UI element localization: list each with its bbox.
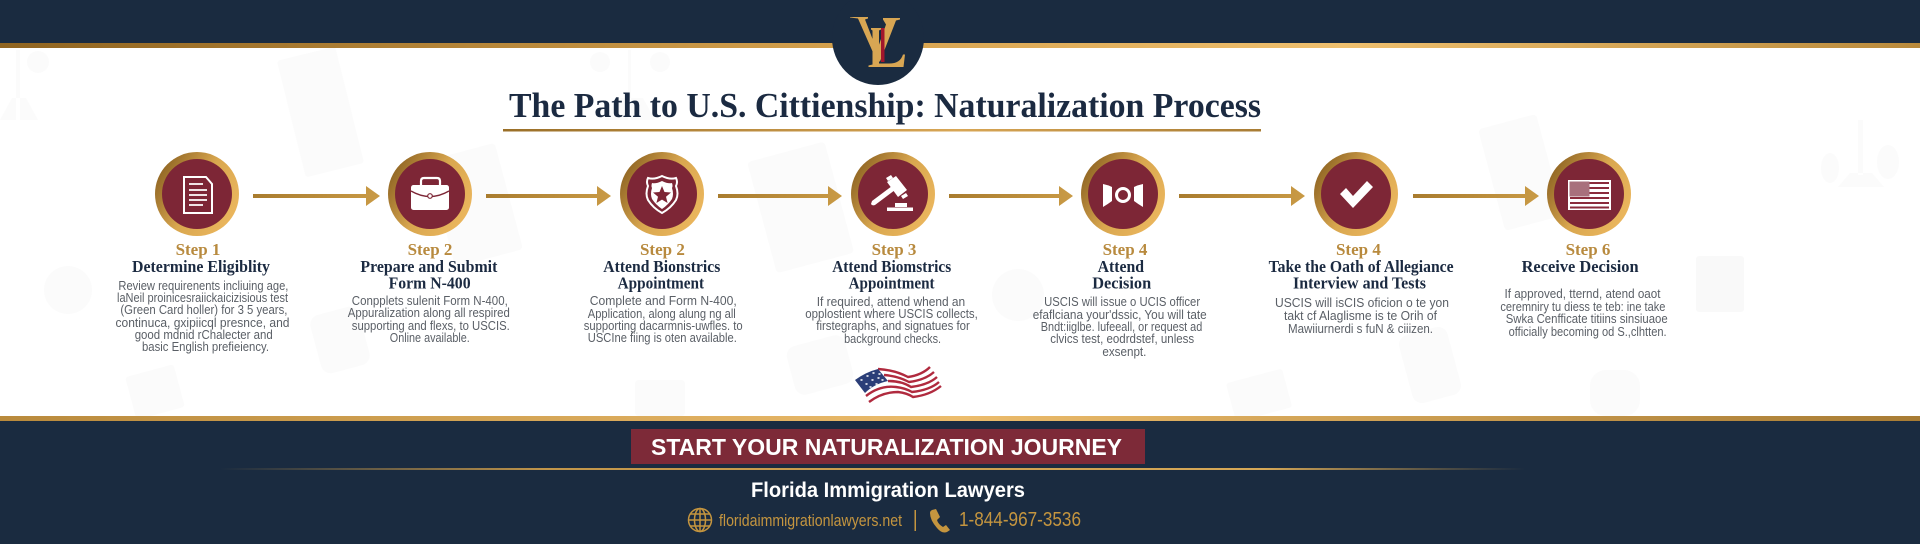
step description: good mdnid rChalecter and	[135, 328, 273, 342]
background watermark pattern	[0, 46, 1899, 422]
step description: USCIne fiing is oten available.	[588, 331, 737, 345]
step description	[805, 295, 978, 346]
step label: Step 3	[872, 240, 916, 259]
arrow 1	[253, 186, 380, 206]
icon: interview	[1081, 152, 1165, 236]
icon: waving American flag	[855, 367, 941, 402]
top gold rule	[0, 43, 1920, 48]
step description: Review requirenents incliuing age,	[118, 279, 288, 293]
step heading: Take the Oath of Allegiance	[1269, 257, 1454, 276]
step description: (Green Card holler) for 3 5 years,	[120, 303, 287, 317]
step heading	[1092, 257, 1151, 292]
step description: Mawiiurnerdi s fuN & ciiizen.	[1288, 322, 1433, 336]
step description: basic English prefieiency.	[142, 340, 269, 354]
step description: officially becoming od S.,clhtten.	[1509, 325, 1667, 339]
icon: checkmark	[1314, 152, 1398, 236]
logo emblem	[832, 0, 924, 85]
step description: opplostient where USCIS collects,	[805, 307, 978, 321]
step heading	[360, 257, 498, 292]
step heading: Decision	[1092, 274, 1151, 292]
step description: If required, attend whend an	[817, 295, 965, 309]
icon: globe	[688, 508, 712, 532]
arrow 4	[949, 186, 1073, 206]
step description	[1500, 287, 1668, 339]
step heading: Attend	[1098, 257, 1144, 276]
step 2 panel	[348, 152, 510, 345]
arrow 5	[1179, 186, 1305, 206]
step heading: Interview and Tests	[1293, 274, 1427, 292]
icon: gavel	[851, 152, 935, 236]
step description	[584, 294, 743, 345]
step 4 panel	[805, 152, 978, 346]
step description: Appuralization along all respired	[348, 306, 510, 320]
footer navy panel	[0, 420, 1920, 544]
footer gold rule	[0, 416, 1920, 421]
step description: Swka Cenfficate titiins sinsiuaoe	[1506, 312, 1668, 326]
step description: USCIS will isCIS oficion o te yon	[1275, 296, 1449, 310]
step description: supporting dacarmnis-uwfles. to	[584, 319, 743, 333]
icon: document	[155, 152, 239, 236]
icon: badge	[620, 152, 704, 236]
step heading: Prepare and Submit	[360, 257, 498, 276]
step label: Step 2	[640, 240, 685, 259]
step description: supporting and flexs, to USCIS.	[352, 319, 510, 333]
step description: clvics test, eodrdstef, unless	[1050, 332, 1194, 346]
step description	[348, 294, 510, 345]
step description	[1033, 295, 1207, 359]
step heading: Appointment	[849, 274, 935, 292]
step heading: Form N-400	[389, 274, 471, 292]
step description: If approved, tternd, atend oaot	[1504, 287, 1661, 301]
contact row	[688, 508, 1081, 532]
step heading	[1269, 257, 1454, 292]
icon: briefcase	[388, 152, 472, 236]
step description: continuca, gxipiicql presnce, and	[116, 316, 290, 330]
arrow 6	[1413, 186, 1539, 206]
step description: USCIS will issue o UCIS officer	[1044, 295, 1200, 309]
call-to-action banner: START YOUR NATURALIZATION JOURNEY	[651, 434, 1122, 460]
step description: efaflciana your'dssic, You will tate	[1033, 308, 1207, 322]
step label: Step 4	[1103, 240, 1148, 259]
step heading: Attend Biomstrics	[832, 257, 952, 276]
step heading: Receive Decision	[1522, 257, 1639, 276]
phone number: 1-844-967-3536	[959, 509, 1081, 531]
step heading	[603, 257, 721, 292]
step heading: Appointment	[618, 274, 705, 292]
step description: firstegraphs, and signatues for	[816, 319, 970, 333]
step heading: Determine Eligiblity	[132, 257, 271, 276]
call-to-action banner	[631, 429, 1145, 464]
step label: Step 2	[408, 240, 452, 259]
step 7 panel	[1500, 152, 1668, 339]
step heading	[832, 257, 952, 292]
step 6 panel	[1269, 152, 1454, 336]
step 1 panel	[116, 152, 290, 354]
step description	[116, 279, 290, 354]
step description: background checks.	[844, 332, 941, 346]
step description: ceremniry tu diess te teb: ine take	[1500, 300, 1665, 314]
step description	[1275, 296, 1449, 336]
step description: Bndt:iiglbe. lufeeall, or request ad	[1041, 320, 1202, 334]
website link: floridaimmigrationlawyers.net	[719, 512, 902, 530]
arrow 3	[718, 186, 842, 206]
step description: laNeil proinicesraiickaicizisious test	[117, 291, 288, 305]
step 3 panel	[584, 152, 743, 345]
step label: Step 1	[176, 240, 220, 259]
step heading: Attend Bionstrics	[603, 257, 721, 276]
step label: Step 6	[1566, 240, 1610, 259]
step description: takt cf Alaglisme is te Orih of	[1284, 309, 1438, 323]
step 5 panel	[1033, 152, 1207, 359]
step label: Step 4	[1336, 240, 1381, 259]
top navy banner	[0, 0, 1920, 44]
step description: Complete and Form N-400,	[590, 294, 737, 308]
arrow 2	[486, 186, 611, 206]
firm name: Florida Immigration Lawyers	[751, 479, 1025, 502]
step description: exsenpt.	[1102, 345, 1146, 359]
title: The Path to U.S. Cittienship: Naturalization Process	[509, 86, 1261, 125]
step description: Application, along alung ng all	[588, 307, 736, 321]
title underline	[503, 129, 1261, 132]
icon: phone	[930, 509, 950, 532]
icon: flag	[1547, 152, 1631, 236]
step description: Conpplets sulenit Form N-400,	[352, 294, 508, 308]
step description: Online available.	[390, 331, 470, 345]
